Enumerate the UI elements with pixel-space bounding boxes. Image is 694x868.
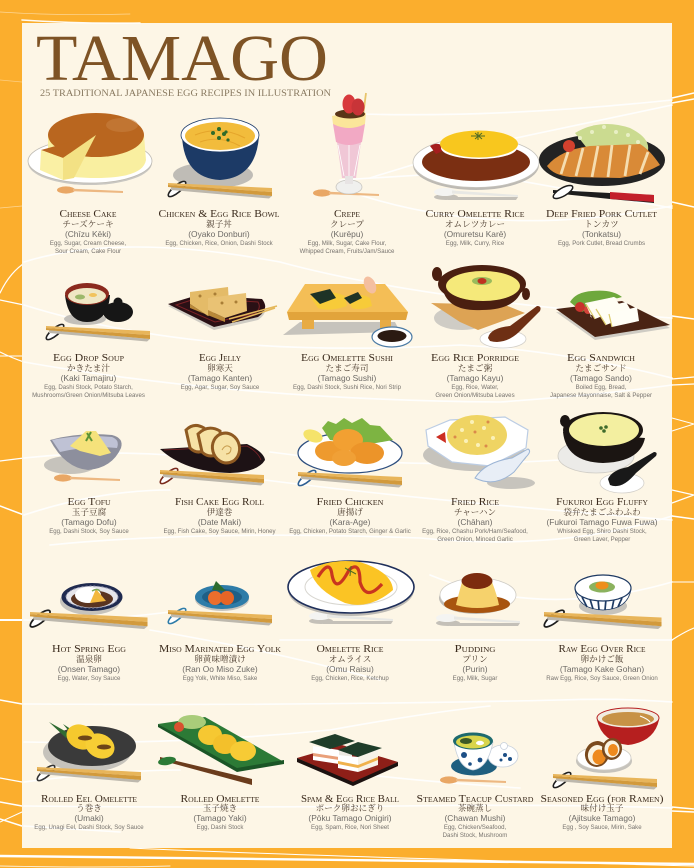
label: fukuroi egg fluffy [546, 497, 658, 543]
label: egg sandwich: Japanese Mayonnaise, Salt & Pepper [550, 392, 652, 399]
panel: curry omelette rice [413, 130, 539, 247]
label: spam and egg rice ball: Spam & Egg Rice Ball [301, 794, 399, 805]
label: steamed teacup custard: Steamed Teacup Custard [416, 794, 534, 805]
label: egg drop soup: Egg, Dashi Stock, Potato Starch, [44, 384, 133, 391]
label: fukuroi egg fluffy: Fukuroi Egg Fluffy [556, 497, 648, 508]
label: spam and egg rice ball: (Pōku Tamago Onigiri) [308, 813, 392, 823]
label: rolled omelette: (Tamago Yaki) [193, 813, 247, 823]
label: egg rice porridge: Green Onion/Mitsuba Leaves [435, 392, 515, 399]
label: egg rice porridge: Egg Rice Porridge [431, 353, 519, 364]
panel: spam and egg rice ball [297, 734, 399, 831]
icon: crepe parfait [313, 93, 379, 197]
label: egg omelette sushi: Egg Omelette Sushi [301, 353, 394, 364]
icon: tonkatsu [539, 124, 665, 203]
label: omelette rice [311, 644, 389, 682]
label: raw egg over rice: 卵かけご飯 [581, 653, 624, 664]
label: egg omelette sushi: たまご寿司 [326, 362, 368, 373]
label: egg tofu: Egg, Dashi Stock, Soy Sauce [49, 528, 129, 535]
label: egg omelette sushi [293, 353, 402, 391]
label: raw egg over rice: Raw Egg, Rice, Soy Sauce, Green Onion [546, 675, 658, 682]
icon: pudding plate [436, 573, 520, 626]
label: fukuroi egg fluffy: (Fukuroi Tamago Fuwa Fuwa) [546, 517, 658, 527]
label: steamed teacup custard: (Chawan Mushi) [445, 813, 506, 823]
label: pudding: プリン [462, 654, 488, 664]
label: rolled omelette: Egg, Dashi Stock [197, 824, 244, 831]
label: egg jelly [181, 353, 260, 391]
panel: chicken and egg rice bowl [158, 118, 280, 247]
icon: chawan mushi cup [440, 732, 518, 784]
icon: egg jelly tray [168, 287, 277, 330]
icon: soup bowl [44, 283, 150, 342]
label: hot spring egg: Egg, Water, Soy Sauce [58, 675, 121, 682]
label: fukuroi egg fluffy: Whisked Egg, Shiro Dashi Stock, [557, 528, 647, 535]
label: rolled eel omelette: Egg, Unagi Eel, Dashi Stock, Soy Sauce [34, 824, 144, 831]
label: cheese cake [50, 209, 126, 255]
icon: miso yolk plate [166, 581, 272, 626]
label: steamed teacup custard: 茶碗蒸し [458, 802, 492, 813]
label: egg drop soup [32, 353, 145, 399]
label: egg drop soup: (Kaki Tamajiru) [61, 373, 117, 383]
label: seasoned egg for ramen: 味付け玉子 [581, 802, 624, 813]
label: curry omelette rice [426, 209, 524, 247]
label: curry omelette rice: Curry Omelette Rice [426, 209, 524, 220]
label: pudding [453, 644, 497, 682]
title: TAMAGO [36, 22, 328, 95]
label: omelette rice: (Omu Raisu) [326, 664, 374, 674]
label: pudding: (Purin) [462, 664, 488, 674]
label: hot spring egg: (Onsen Tamago) [58, 664, 120, 674]
label: cheese cake: Egg, Sugar, Cream Cheese, [50, 240, 126, 247]
label: fish cake egg roll: 伊達巻 [207, 506, 233, 517]
panel: seasoned egg for ramen [540, 708, 664, 831]
label: crepe: クレープ [330, 219, 364, 229]
icon: fried rice plate [423, 415, 535, 489]
label: spam and egg rice ball [301, 794, 399, 831]
label: deep fried pork cutlet: (Tonkatsu) [582, 229, 621, 239]
label: egg rice porridge: たまご粥 [458, 362, 493, 373]
label: fukuroi egg fluffy: Green Laver, Pepper [574, 536, 630, 543]
panel: fried rice [422, 415, 535, 543]
label: egg tofu: (Tamago Dofu) [61, 517, 117, 527]
label: omelette rice: Egg, Chicken, Rice, Ketchup [311, 675, 389, 682]
icon: umaki plate [35, 720, 141, 783]
label: deep fried pork cutlet [546, 209, 658, 247]
label: fried rice: Egg, Rice, Chashu Pork/Ham/Seafood, [422, 528, 528, 535]
label: egg rice porridge: (Tamago Kayu) [447, 373, 504, 383]
label: spam and egg rice ball: Egg, Spam, Rice, Nori Sheet [311, 824, 389, 831]
label: rolled eel omelette: う巻き [76, 802, 102, 813]
label: omelette rice: Omelette Rice [316, 644, 384, 655]
label: rolled eel omelette: Rolled Eel Omelette [41, 794, 137, 805]
label: rolled omelette [180, 794, 260, 831]
label: miso marinated egg yolk: Miso Marinated Egg Yolk [159, 644, 281, 655]
label: hot spring egg: 温泉卵 [76, 653, 102, 664]
label: omelette rice: オムライス [329, 654, 371, 664]
panel: rolled omelette [157, 715, 284, 831]
icon: curry omelette [413, 130, 539, 200]
label: steamed teacup custard [416, 794, 534, 839]
label: crepe: Crepe [334, 209, 360, 220]
label: fukuroi egg fluffy: 袋弁たまごふわふわ [563, 506, 641, 517]
label: pudding: Egg, Milk, Sugar [453, 675, 497, 682]
label: chicken and egg rice bowl: 親子丼 [206, 218, 232, 229]
icon: fluffy egg pot [558, 412, 657, 493]
icon: date maki plate [158, 425, 265, 486]
label: raw egg over rice: Raw Egg Over Rice [558, 644, 646, 655]
label: egg drop soup: Egg Drop Soup [53, 353, 124, 364]
label: miso marinated egg yolk: Egg Yolk, White Miso, Sake [183, 675, 258, 682]
label: fish cake egg roll: (Date Maki) [198, 517, 241, 527]
icon: tamago yaki on leaf [157, 715, 284, 785]
label: miso marinated egg yolk: (Ran Oo Miso Zuke) [182, 664, 258, 674]
label: cheese cake: Cheese Cake [60, 209, 116, 220]
label: deep fried pork cutlet: Deep Fried Pork Cutlet [546, 209, 658, 220]
panel: miso marinated egg yolk [159, 581, 281, 682]
label: fried rice: Fried Rice [451, 497, 499, 508]
label: miso marinated egg yolk [159, 644, 281, 682]
label: crepe: Egg, Milk, Sugar, Cake Flour, [308, 240, 387, 247]
icon: rice bowl [166, 118, 272, 199]
label: egg rice porridge [431, 353, 519, 399]
label: deep fried pork cutlet: トンカツ [584, 219, 619, 229]
panel: pudding [436, 573, 520, 682]
icon: ramen bowl and egg [551, 708, 659, 790]
panel: steamed teacup custard [416, 732, 534, 839]
panel: egg omelette sushi [283, 275, 412, 391]
label: steamed teacup custard: Egg, Chicken/Seafood, [444, 824, 506, 831]
label: curry omelette rice: オムレツカレー [445, 219, 505, 229]
panel: omelette rice [288, 561, 414, 682]
icon: sushi board [283, 275, 412, 347]
label: pudding: Pudding [454, 644, 496, 655]
label: egg sandwich: たまごサンド [575, 363, 627, 373]
label: fried rice [422, 497, 528, 543]
panel: fish cake egg roll [158, 425, 277, 535]
icon: onsen egg dish [28, 583, 148, 629]
panel: rolled eel omelette [34, 720, 144, 831]
label: chicken and egg rice bowl: (Oyako Donburi) [188, 229, 250, 239]
label: egg jelly: Egg Jelly [199, 353, 241, 364]
label: fish cake egg roll: Egg, Fish Cake, Soy Sauce, Mirin, Honey [163, 528, 277, 535]
label: fried chicken [289, 497, 411, 535]
label: raw egg over rice: (Tamago Kake Gohan) [560, 664, 644, 674]
label: crepe: Whipped Cream, Fruits/Jam/Sauce [300, 248, 395, 255]
icon: cheese cake [28, 113, 152, 194]
label: curry omelette rice: Egg, Milk, Curry, Rice [446, 240, 505, 247]
label: egg drop soup: かきたま汁 [67, 362, 110, 373]
label: seasoned egg for ramen: (Ajitsuke Tamago) [569, 813, 636, 823]
label: fried chicken: 唐揚げ [337, 506, 363, 517]
icon: clay pot porridge [431, 265, 541, 348]
label: egg rice porridge: Egg, Rice, Water, [451, 384, 499, 391]
label: egg sandwich: Boiled Egg, Bread, [576, 384, 627, 391]
label: fish cake egg roll [163, 497, 277, 535]
label: fried rice: チャーハン [454, 507, 496, 517]
label: chicken and egg rice bowl: Egg, Chicken, Rice, Onion, Dashi Stock [165, 240, 274, 247]
panel: fukuroi egg fluffy [546, 412, 658, 543]
panel: crepe [300, 93, 395, 255]
label: fried chicken: Egg, Chicken, Potato Starch, Ginger & Garlic [289, 528, 411, 535]
icon: tofu bowl [44, 431, 122, 482]
panel: egg sandwich [550, 291, 670, 399]
label: curry omelette rice: (Omuretsu Karē) [444, 229, 506, 239]
panel: egg jelly [168, 287, 277, 391]
label: egg tofu [49, 497, 129, 535]
label: hot spring egg [52, 644, 126, 682]
panel: fried chicken [289, 418, 411, 535]
label: fried rice: (Chāhan) [458, 517, 493, 527]
label: rolled omelette: Rolled Omelette [180, 794, 260, 805]
panel: egg tofu [44, 431, 129, 535]
icon: spam onigiri on tray [297, 734, 398, 786]
panel: cheese cake [28, 113, 152, 255]
label: cheese cake: Sour Cream, Cake Flour [55, 248, 121, 255]
label: steamed teacup custard: Dashi Stock, Mushroom [443, 832, 507, 839]
label: spam and egg rice ball: ポーク卵おにぎり [316, 802, 384, 813]
label: miso marinated egg yolk: 卵黄味噌漬け [194, 653, 246, 664]
label: rolled eel omelette: (Umaki) [74, 813, 104, 823]
label: egg tofu: Egg Tofu [68, 497, 110, 508]
label: egg sandwich: Egg Sandwich [567, 353, 635, 364]
label: raw egg over rice [546, 644, 658, 682]
label: seasoned egg for ramen: Egg , Soy Sauce, Mirin, Sake [562, 824, 642, 831]
panel: egg rice porridge [431, 265, 541, 399]
label: deep fried pork cutlet: Egg, Pork Cutlet, Bread Crumbs [558, 240, 645, 247]
label: egg jelly: 卵寒天 [207, 362, 233, 373]
label: cheese cake: (Chīzu Kēki) [65, 229, 111, 239]
label: fried chicken: Fried Chicken [316, 497, 384, 508]
label: chicken and egg rice bowl: Chicken & Egg Rice Bowl [158, 209, 280, 220]
label: crepe: (Kurēpu) [331, 229, 363, 239]
icon: fried chicken plate [296, 418, 402, 488]
label: seasoned egg for ramen [540, 794, 664, 831]
icon: sandwich board [556, 291, 670, 340]
label: egg sandwich: (Tamago Sando) [570, 373, 632, 383]
label: egg drop soup: Mushrooms/Green Onion/Mitsuba Leaves [32, 392, 145, 399]
icon: omurice plate [288, 561, 414, 624]
label: egg omelette sushi: Egg, Dashi Stock, Sushi Rice, Nori Strip [293, 384, 402, 391]
label: egg omelette sushi: (Tamago Sushi) [318, 373, 377, 383]
label: fish cake egg roll: Fish Cake Egg Roll [175, 497, 264, 508]
panel: egg drop soup [32, 283, 150, 399]
label: hot spring egg: Hot Spring Egg [52, 644, 126, 655]
label: chicken and egg rice bowl [158, 209, 280, 247]
panel: deep fried pork cutlet [539, 124, 665, 247]
label: fried chicken: (Kara-Age) [330, 517, 371, 527]
label: egg jelly: (Tamago Kanten) [188, 373, 252, 383]
label: crepe [300, 209, 395, 255]
subtitle: 25 TRADITIONAL JAPANESE EGG RECIPES IN ILLUSTRATION [40, 89, 331, 99]
label: egg tofu: 玉子豆腐 [72, 506, 107, 517]
panel: raw egg over rice [542, 575, 662, 682]
label: egg jelly: Egg, Agar, Sugar, Soy Sauce [181, 384, 260, 391]
label: seasoned egg for ramen: Seasoned Egg (for Ramen) [540, 794, 664, 805]
icon: rice bowl with raw egg [542, 575, 662, 629]
label: rolled omelette: 玉子焼き [203, 802, 237, 813]
label: cheese cake: チーズケーキ [62, 219, 114, 229]
label: rolled eel omelette [34, 794, 144, 831]
label: egg sandwich [550, 353, 652, 399]
label: fried rice: Green Onion, Minced Garlic [437, 536, 513, 543]
panel: hot spring egg [28, 583, 148, 682]
